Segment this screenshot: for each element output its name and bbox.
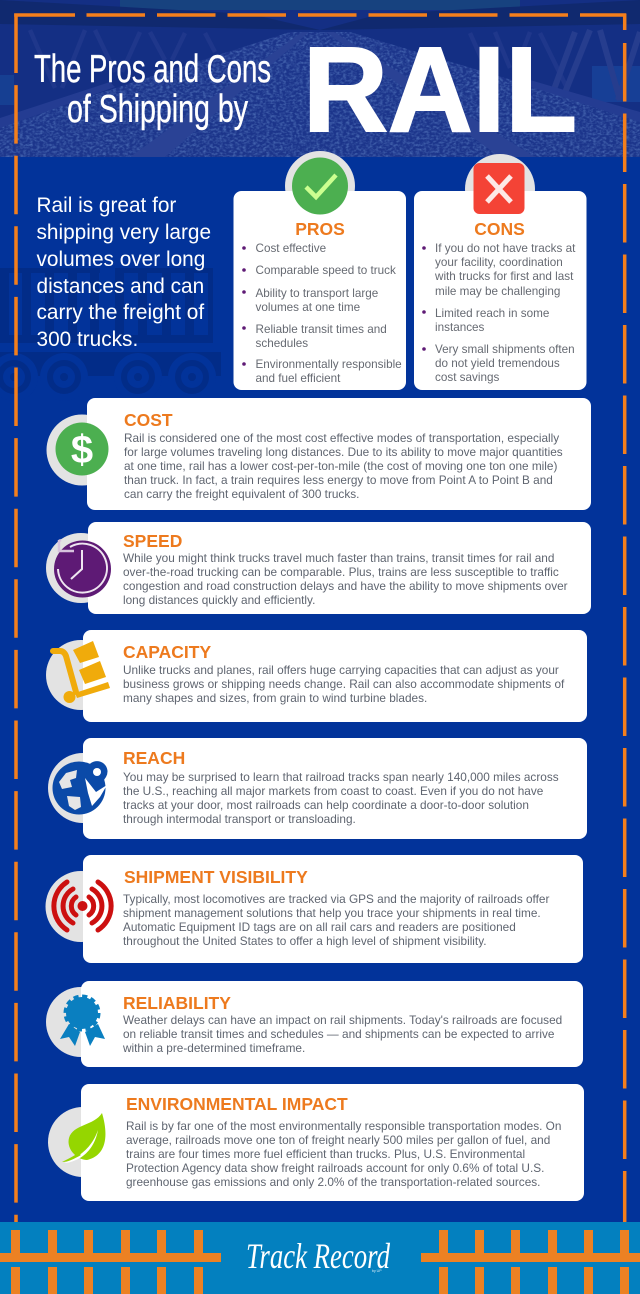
reach heading: REACH xyxy=(123,748,185,768)
panel: pros xyxy=(234,151,406,390)
icon: ribbon badge xyxy=(60,996,105,1046)
cons list: Limited reach in some xyxy=(435,307,549,320)
shipment visibility text xyxy=(123,892,549,948)
cons list: your facility, coordination xyxy=(435,256,563,269)
reach text: tracks at your door, most railroads can help coordinate a door-to-door solution xyxy=(123,798,529,812)
pros heading: PROS xyxy=(295,219,345,239)
title xyxy=(34,21,577,157)
intro text: volumes over long xyxy=(36,248,205,271)
header photo: railway bridge xyxy=(0,0,640,157)
environmental impact text: Protection Agency data show freight railroads account for only 0.6% of total U.S. xyxy=(126,1161,544,1175)
title: of Shipping by xyxy=(67,88,248,131)
shipment visibility text: Automatic Equipment ID tags are on all rail cars and readers are positioned xyxy=(123,920,516,934)
cons list: Very small shipments often xyxy=(435,343,575,356)
shipment visibility text: shipment management solutions that help you trace your shipments in real time. xyxy=(123,906,541,920)
cost text: than truck. In fact, a train requires less energy to move from Point A to Point B and xyxy=(124,473,553,487)
logo: Track Record: Track Record xyxy=(246,1236,391,1276)
icon: dollar: $ xyxy=(71,428,93,472)
environmental impact text: greenhouse gas emissions and only 2.0% of the transportation-related sources. xyxy=(126,1175,540,1189)
cons list xyxy=(422,242,576,384)
speed heading: SPEED xyxy=(123,531,182,551)
icon: globe and pin xyxy=(52,761,108,814)
icon: leaf xyxy=(62,1113,105,1163)
logo: Track Record: by UP xyxy=(372,1269,382,1273)
capacity text: many shapes and sizes, from grain to wind turbine blades. xyxy=(123,691,427,705)
panel: speed xyxy=(46,522,591,614)
panel: reliability xyxy=(46,981,583,1067)
speed text: long distances quickly and efficiently. xyxy=(123,593,315,607)
reliability text: within a pre-determined timeframe. xyxy=(122,1041,305,1055)
panel: cons xyxy=(414,154,586,390)
reliability text: Weather delays can have an impact on rail shipments. Today's railroads are focused xyxy=(123,1013,562,1027)
icon: red x xyxy=(474,163,524,214)
intro text: distances and can xyxy=(36,275,204,298)
shipment visibility text: throughout the United States to offer a high level of shipment visibility. xyxy=(123,934,487,948)
panel: reach xyxy=(48,738,587,839)
shipment visibility heading: SHIPMENT VISIBILITY xyxy=(124,867,308,887)
right rail track xyxy=(421,1230,640,1294)
environmental impact text: trains are four times more fuel efficient than trucks. Plus, U.S. Environmental xyxy=(126,1147,525,1161)
environmental impact heading: ENVIRONMENTAL IMPACT xyxy=(126,1094,348,1114)
reach text: You may be surprised to learn that railroad tracks span nearly 140,000 miles across xyxy=(123,770,559,784)
pros list xyxy=(242,242,402,385)
capacity text xyxy=(123,663,565,705)
panel: environmental impact xyxy=(48,1084,584,1201)
pros list: Environmentally responsible xyxy=(256,358,402,371)
cost text xyxy=(124,431,563,501)
cost text: for large volumes traveling long distances. Due to its ability to move major quantities xyxy=(124,445,563,459)
intro text: Rail is great for xyxy=(36,194,176,217)
pros list: schedules xyxy=(256,337,308,350)
panel: capacity xyxy=(46,630,587,722)
title: RAIL xyxy=(303,21,577,157)
environmental impact text: Rail is by far one of the most environmentally responsible transportation modes. On xyxy=(126,1119,561,1133)
pros list: Comparable speed to truck xyxy=(256,264,396,277)
intro text: 300 trucks. xyxy=(36,328,138,351)
speed text: While you might think trucks travel much faster than trains, transit times for rail and xyxy=(123,551,554,565)
panel: shipment visibility xyxy=(46,855,583,963)
footer band xyxy=(0,1222,640,1294)
cost text: at one time, rail has a lower cost-per-ton-mile (the cost of moving one ton one mile) xyxy=(124,459,557,473)
cons list: cost savings xyxy=(435,371,499,384)
pros list: Reliable transit times and xyxy=(256,323,387,336)
icon: green check xyxy=(292,158,348,214)
capacity text: Unlike trucks and planes, rail offers huge carrying capacities that can adjust as your xyxy=(123,663,559,677)
reliability heading: RELIABILITY xyxy=(123,993,231,1013)
icon: hand truck xyxy=(53,641,110,703)
intro text xyxy=(36,194,211,351)
speed text: congestion and road construction delays and have the ability to move shipments over xyxy=(123,579,568,593)
environmental impact text: average, railroads move one ton of freight nearly 500 miles per gallon of fuel, and xyxy=(126,1133,550,1147)
panel: cost xyxy=(46,398,591,510)
left rail track xyxy=(0,1230,221,1294)
cost heading: COST xyxy=(124,410,173,430)
cons list: mile may be challenging xyxy=(435,285,560,298)
pros list: Ability to transport large xyxy=(256,287,378,300)
speed text xyxy=(123,551,568,607)
title: The Pros and Cons xyxy=(34,48,271,91)
shipment visibility text: Typically, most locomotives are tracked via GPS and the majority of railroads offer xyxy=(123,892,549,906)
pros list: volumes at one time xyxy=(256,301,360,314)
reach text: the U.S., reaching all major markets from coast to coast. Even if you do not have xyxy=(123,784,544,798)
cons list: If you do not have tracks at xyxy=(435,242,576,255)
reliability text: on reliable transit times and schedules — and shipments can be expected to arrive xyxy=(123,1027,555,1041)
icon: clock xyxy=(54,540,111,598)
pros list: Cost effective xyxy=(256,242,326,255)
speed text: over-the-road trucking can be comparable. Plus, trains are less susceptible to traffic xyxy=(123,565,559,579)
reach text xyxy=(123,770,559,826)
capacity heading: CAPACITY xyxy=(123,642,211,662)
cons heading: CONS xyxy=(474,219,525,239)
intro text: shipping very large xyxy=(36,221,211,244)
cost text: Rail is considered one of the most cost effective modes of transportation, especially xyxy=(124,431,559,445)
reach text: through intermodal transport or transloading. xyxy=(123,812,356,826)
icon: signal xyxy=(54,882,111,930)
background icon: rail car silhouette xyxy=(0,268,221,401)
capacity text: business grows or shipping needs change. Rail can also accommodate shipments of xyxy=(123,677,565,691)
icon: dollar xyxy=(56,422,108,476)
cons list: with trucks for first and last xyxy=(434,270,574,283)
cost text: can carry the freight equivalent of 300 trucks. xyxy=(124,487,359,501)
cons list: do not yield tremendous xyxy=(435,357,560,370)
reliability text xyxy=(122,1013,562,1055)
intro text: carry the freight of xyxy=(36,301,204,324)
environmental impact text xyxy=(126,1119,561,1189)
cons list: instances xyxy=(435,321,485,334)
pros list: and fuel efficient xyxy=(256,372,341,385)
